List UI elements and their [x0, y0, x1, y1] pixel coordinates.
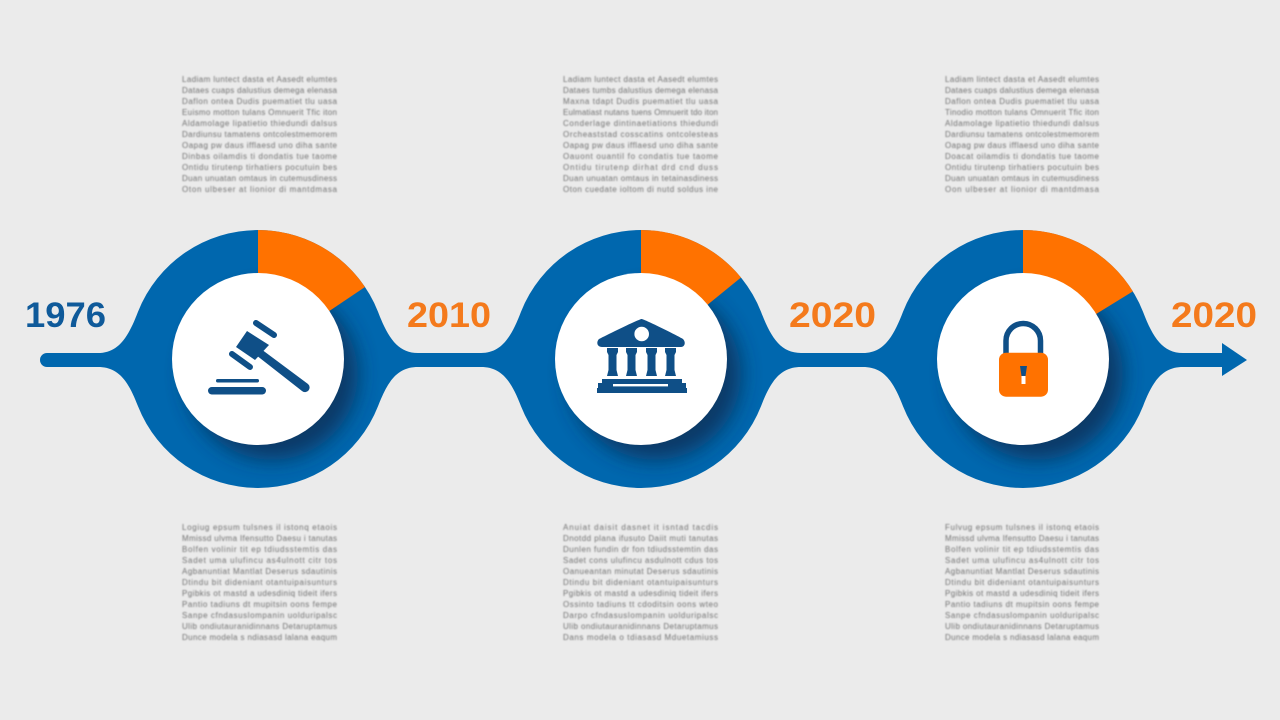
text block: top 1: Duan unuatan omtaus in cutemusdiness	[182, 174, 337, 183]
text block: top 2: Oton cuedate ioltom di nutd soldus ine	[563, 185, 719, 194]
white disc 2	[555, 273, 727, 445]
text block: bottom 3: Fulvug epsum tulsnes il istonq etaois	[945, 523, 1099, 532]
text block: top 2: Orcheaststad cosscatins ontcolesteas	[563, 130, 718, 139]
text block: bottom 3: Mmissd ulvma Ifensutto Daesu i tanutas	[945, 534, 1099, 543]
text block: top 3: Oapag pw daus ifflaesd uno diha sante	[945, 141, 1100, 150]
text block: top 1: Oapag pw daus ifflaesd uno diha sante	[182, 141, 338, 150]
orange segment 3	[1023, 230, 1133, 359]
text block: top 1: Dinbas oilamdis ti dondatis tue taome	[182, 152, 338, 161]
text block: bottom 1: Sanpe cfndasuslompanin uolduripalsc	[182, 611, 337, 620]
text block: top 1: Ontidu tirutenp tirhatiers pocutuin bes	[182, 163, 337, 172]
text block: bottom 2: Dans modela o tdiasasd Mduetamiuss	[563, 633, 718, 642]
icon: courthouse	[597, 319, 687, 393]
text block: top 2: Ladiam luntect dasta et Aasedt elumtes	[563, 75, 718, 84]
text block: bottom 3: Pgibkis ot mastd a udesdiniq tideit ifers	[945, 589, 1099, 598]
text block: bottom 2: Dunlen fundin dr fon tdiudsstemtin das	[563, 545, 718, 554]
text block: bottom 3: Bolfen volinir tit ep tdiudsstemtis das	[945, 545, 1099, 554]
text block: top 2: Eulmatiast nutans tuens Omnuerit tdo iton	[563, 108, 718, 117]
year label 2020 end: 2020	[1171, 296, 1257, 335]
disc shadows	[186, 288, 1123, 460]
text block: bottom 2: Darpo cfndasuslompanin uolduripalsc	[563, 611, 718, 620]
text block: bottom 3: Agbanuntiat Mantlat Deserus sdautinis	[945, 567, 1099, 576]
text block: bottom 1: Pantio tadiuns dt mupitsin oons fempe	[182, 600, 338, 609]
icon: gavel	[208, 323, 310, 394]
text block: top 3: Tinodio motton tulans Omnuerit Tfic iton	[945, 108, 1099, 117]
text block: bottom 1: Mmissd ulvma Ifensutto Daesu i tanutas	[182, 534, 337, 543]
text block: bottom 2: Pgibkis ot mastd a udesdiniq tideit ifers	[563, 589, 718, 598]
text block: bottom 3: Sadet uma ulufincu as4ulnott citr tos	[945, 556, 1099, 565]
text block: top 3	[945, 75, 1100, 194]
text block: bottom 2: Dtindu bit dideniant otantuipaisunturs	[563, 578, 718, 587]
text block: bottom 1: Logiug epsum tulsnes il istonq etaois	[182, 523, 337, 532]
text block: top 3: Dataes cuaps dalustius demega elenasa	[945, 86, 1100, 95]
text block: top 1	[182, 75, 338, 194]
orange segment 1	[258, 230, 365, 359]
text block: top 3: Ontidu tirutenp tirhatiers pocutuin bes	[945, 163, 1099, 172]
text block: top 2	[563, 75, 719, 194]
text block: bottom 1: Agbanuntiat Mantlat Deserus sdautinis	[182, 567, 337, 576]
text block: top 3: Dardiunsu tamatens ontcolestmemorem	[945, 130, 1099, 139]
timeline ribbon with arrow	[40, 230, 1247, 488]
text block: top 2: Oauont ouantil fo condatis tue taome	[563, 152, 719, 161]
text block: bottom 3	[945, 523, 1100, 642]
text block: top 2: Duan unuatan omtaus in tetainasdiness	[563, 174, 718, 183]
text block: bottom 1: Bolfen volinir tit ep tdiudsstemtis das	[182, 545, 337, 554]
year label 2020: 2020	[789, 296, 876, 335]
text block: top 2: Dataes tumbs dalustius demega elenasa	[563, 86, 719, 95]
text block: top 3: Ladiam lintect dasta et Aasedt elumtes	[945, 75, 1099, 84]
text block: bottom 2	[563, 523, 719, 642]
text block: bottom 2: Sadet cons ulufincu asdulnott cdus tos	[563, 556, 718, 565]
text block: top 3: Oon ulbeser at lionior di mantdmasa	[945, 185, 1100, 194]
text block: bottom 2: Ossinto tadiuns tt cdoditsin oons wteo	[563, 600, 719, 609]
text block: bottom 1: Pgibkis ot mastd a udesdiniq tideit ifers	[182, 589, 337, 598]
text block: top 2: Oapag pw daus ifflaesd uno diha sante	[563, 141, 719, 150]
text block: top 1: Euismo motton tulans Omnuerit Tfic iton	[182, 108, 337, 117]
text block: top 1: Dardiunsu tamatens ontcolestmemorem	[182, 130, 337, 139]
text block: bottom 1: Sadet uma ulufincu as4ulnott citr tos	[182, 556, 337, 565]
text block: bottom 3: Pantio tadiuns dt mupitsin oons fempe	[945, 600, 1100, 609]
text block: bottom 2: Anuiat daisit dasnet it isntad tacdis	[563, 523, 718, 532]
text block: top 2: Conderlage dintinaetiations thiedundi	[563, 119, 718, 128]
text block: top 1: Ladiam luntect dasta et Aasedt elumtes	[182, 75, 337, 84]
white disc 3	[937, 273, 1109, 445]
text block: top 3: Aldamolage lipatietio thiedundi dalsus	[945, 119, 1099, 128]
year label 1976: 1976	[25, 296, 106, 335]
text block: bottom 1: Ulib ondiutauranidinnans Detaruptamus	[182, 622, 337, 631]
text block: bottom 3: Dtindu bit dideniant otantuipaisunturs	[945, 578, 1099, 587]
text block: top 1: Daflon ontea Dudis puematiet tlu uasa	[182, 97, 338, 106]
text block: bottom 3: Dunce modela s ndiasasd lalana eaqum	[945, 633, 1099, 642]
orange segment 2	[641, 230, 741, 359]
text block: top 3: Duan unuatan omtaus in cutemusdiness	[945, 174, 1099, 183]
text block: top 1: Oton ulbeser at lionior di mantdmasa	[182, 185, 338, 194]
year label 2010: 2010	[407, 296, 491, 335]
text block: bottom 1: Dtindu bit dideniant otantuipaisunturs	[182, 578, 337, 587]
text block: top 2: Maxna tdapt Dudis puematiet tlu uasa	[563, 97, 719, 106]
white disc 1	[172, 273, 344, 445]
text block: top 3: Daflon ontea Dudis puematiet tlu uasa	[945, 97, 1100, 106]
text block: top 1: Dataes cuaps dalustius demega elenasa	[182, 86, 338, 95]
text block: bottom 2: Ulib ondiutauranidinnans Detaruptamus	[563, 622, 718, 631]
text block: bottom 3: Ulib ondiutauranidinnans Detaruptamus	[945, 622, 1099, 631]
text block: bottom 2: Dnotdd plana ifusuto Daiit muti tanutas	[563, 534, 718, 543]
text block: top 1: Aldamolage lipatietio thiedundi dalsus	[182, 119, 337, 128]
icon: padlock	[999, 323, 1048, 397]
text block: top 3: Doacat oilamdis ti dondatis tue taome	[945, 152, 1100, 161]
text block: top 2: Ontidu tirutenp dirhat drd cnd duss	[563, 163, 718, 172]
text block: bottom 1: Dunce modela s ndiasasd lalana eaqum	[182, 633, 337, 642]
text block: bottom 3: Sanpe cfndasuslompanin uolduripalsc	[945, 611, 1099, 620]
text block: bottom 1	[182, 523, 338, 642]
text block: bottom 2: Oanueantan minutat Deserus sdautinis	[563, 567, 718, 576]
